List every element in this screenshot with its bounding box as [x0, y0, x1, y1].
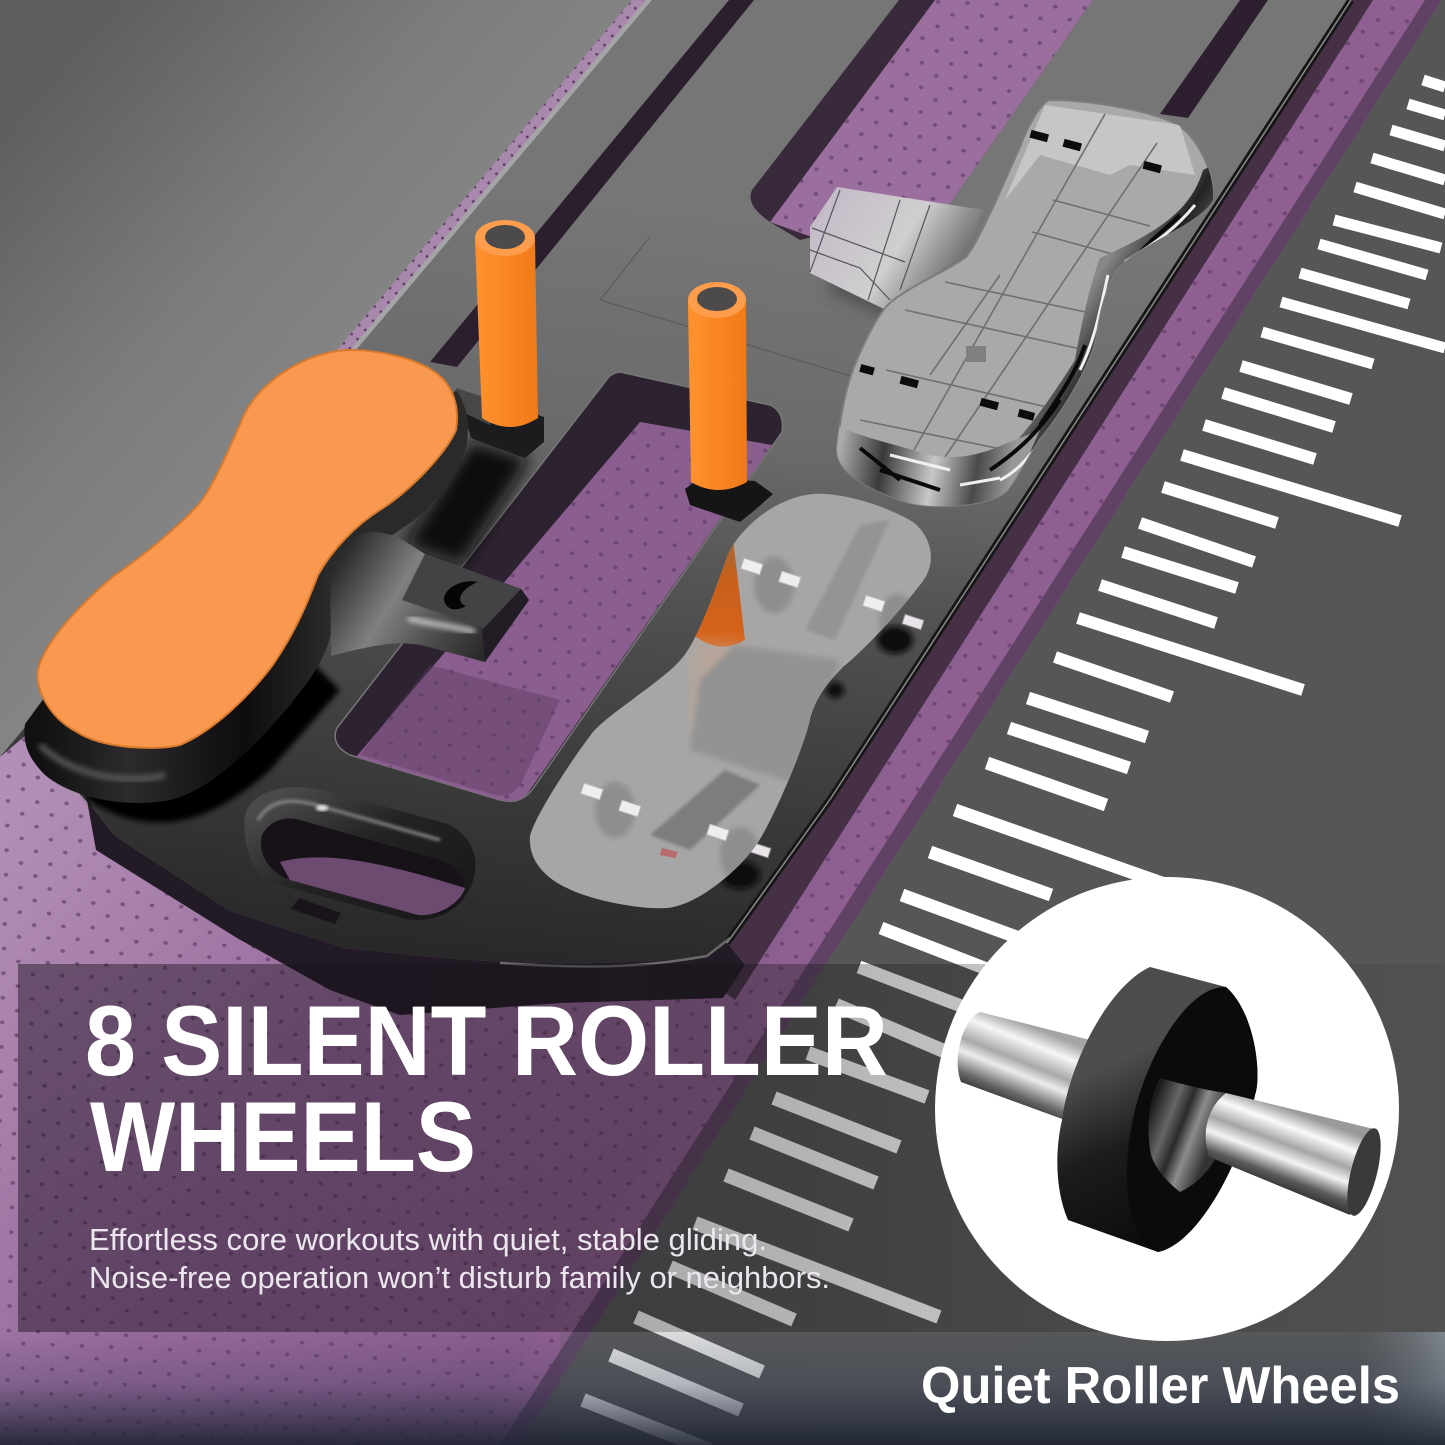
mat outer edge band — [500, 0, 1442, 1445]
wheel hub rings — [1148, 1078, 1226, 1192]
orange pad base — [24, 390, 468, 803]
left axle — [958, 1012, 1090, 1120]
long dark slot — [430, 0, 754, 367]
orange pad — [38, 350, 457, 748]
grey board — [0, 0, 1350, 963]
lower wheel shadows — [720, 626, 913, 889]
hole purple floor — [280, 857, 465, 915]
axle end cap — [1340, 1125, 1388, 1219]
foot crescent — [444, 581, 478, 609]
pad chrome bottom side — [836, 426, 1040, 506]
lower transparent pad — [530, 494, 931, 908]
tray rim highlight — [500, 938, 730, 967]
pivot foot — [330, 532, 529, 662]
pad base highlight — [40, 745, 165, 779]
icon: roller wheel — [958, 967, 1388, 1252]
pad shadow — [80, 650, 340, 823]
thin purple stripe — [42, 0, 652, 700]
foot highlight — [408, 618, 475, 632]
upper purple slot — [750, 0, 1093, 240]
bottom caption bar — [0, 1332, 1445, 1445]
central tray window — [335, 372, 782, 801]
ghost spine — [805, 520, 890, 640]
upper transparent pad — [830, 100, 1225, 515]
right axle — [1206, 1093, 1378, 1215]
visible axles — [581, 558, 885, 841]
pad chrome right side — [1018, 168, 1214, 470]
caption: Quiet Roller Wheels — [921, 1357, 1400, 1415]
protruding axles — [749, 614, 924, 858]
pad grid lines — [860, 114, 1157, 457]
wheel face — [1127, 987, 1258, 1252]
pad chassis square — [966, 346, 986, 362]
hole glossy highlights — [258, 801, 440, 840]
description: Noise-free operation won’t disturb family or neighbors. — [89, 1260, 830, 1295]
ghost wheels — [595, 557, 915, 883]
inset circle — [935, 877, 1399, 1341]
faint board outline — [600, 238, 854, 377]
short dark slot — [1160, 0, 1268, 118]
description: Effortless core workouts with quiet, stable gliding. — [89, 1222, 767, 1257]
ghost chassis — [690, 645, 840, 785]
top left grey deck — [0, 0, 640, 757]
foot plate — [402, 554, 521, 629]
overlay text panel — [18, 964, 1445, 1332]
window floor shadow patch — [360, 665, 560, 796]
pad glossy top — [1005, 105, 1195, 200]
handle hole — [244, 787, 476, 920]
tray underside — [86, 795, 745, 1015]
title — [85, 985, 888, 1192]
grip bracket right — [685, 478, 773, 522]
tray notch — [291, 898, 341, 924]
bracket soft shadow — [405, 440, 530, 565]
title: 8 SILENT ROLLER — [85, 985, 888, 1096]
pad slots — [859, 130, 1162, 421]
wheel rim — [1057, 967, 1258, 1252]
black edge rail — [727, 0, 1351, 943]
ruler dashes — [583, 80, 1445, 1445]
grip bracket left — [405, 388, 544, 565]
orange grip left — [475, 220, 538, 427]
orange grip right — [688, 282, 747, 490]
upper transparent block — [810, 187, 984, 325]
description — [89, 1222, 830, 1295]
rail shadow wall — [715, 0, 1373, 1000]
title: WHEELS — [90, 1081, 476, 1192]
reflected grip — [695, 539, 745, 647]
mat highlight band — [470, 0, 1425, 1445]
